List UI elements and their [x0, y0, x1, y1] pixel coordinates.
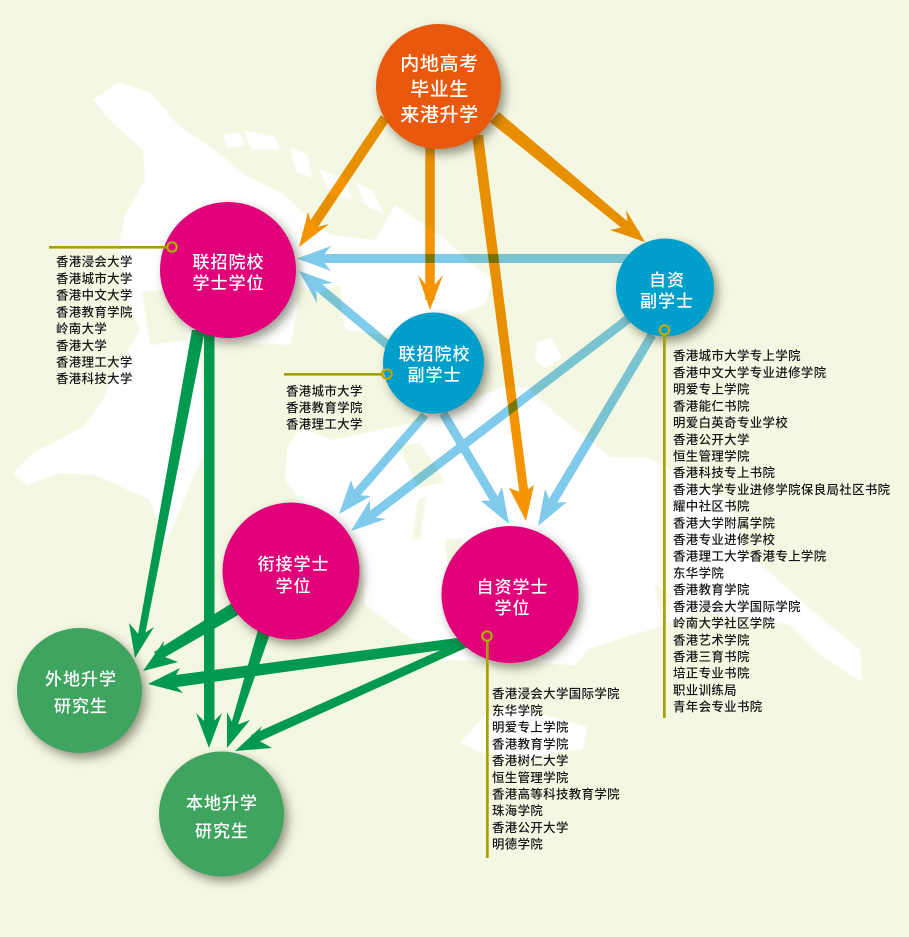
node: 联招院校学士学位: 学士学位 [192, 273, 264, 293]
institution list: 自资副学士: 香港中文大学专业进修学院 [673, 365, 827, 380]
institution list: 自资学士: 东华学院 [492, 703, 543, 718]
institution list: 联招副学士: 香港理工大学 [286, 416, 363, 432]
node: 自资副学士: 副学士 [640, 291, 694, 311]
arrow: 联招副学士 to 自资学士 [443, 413, 509, 524]
institution list: 联招学士: 岭南大学 [56, 321, 107, 336]
institution list: 自资学士: 明爱专上学院 [492, 720, 569, 735]
institution list: 自资学士: 香港树仁大学 [492, 753, 569, 768]
node: 内地高考毕业生来港升学 [376, 24, 501, 149]
institution list: 自资副学士: 香港大学专业进修学院保良局社区书院 [673, 482, 891, 497]
arrow: 内地 to 联招学士 [299, 118, 385, 247]
institution list: 自资副学士: 香港理工大学香港专上学院 [673, 549, 827, 564]
node: 衔接学士学位: 衔接学士 [258, 554, 330, 574]
arrow: 联招副学士 to 衔接学士 [339, 415, 425, 514]
callout line: 自资学士 [482, 631, 492, 858]
institution list: 联招副学士: 香港城市大学 [286, 384, 363, 398]
node: 内地高考毕业生来港升学: 内地高考 [400, 53, 479, 75]
institution list: 自资学士: 香港教育学院 [492, 736, 569, 751]
arrow: 联招学士 to 外地升学 [129, 330, 205, 658]
institution list: 自资副学士: 香港科技专上书院 [673, 465, 776, 480]
arrow: 自资副学士 to 自资学士 [538, 335, 652, 526]
institution list: 自资学士: 珠海学院 [492, 803, 543, 818]
institution list: 联招副学士: 香港教育学院 [286, 400, 363, 415]
node: 联招院校副学士: 联招院校 [398, 345, 470, 364]
institution list: 自资副学士: 培正专业书院 [673, 666, 750, 681]
node: 本地升学研究生 [159, 752, 284, 876]
institution list: 自资学士: 香港公开大学 [492, 820, 569, 835]
callout line: 联招副学士 [284, 369, 392, 379]
institution list: 自资副学士: 香港城市大学专上学院 [673, 348, 801, 363]
institution list: 联招学士: 香港科技大学 [56, 371, 133, 386]
arrow: 内地 to 自资学士 [472, 135, 534, 521]
arrows: light blue transfer routes [297, 246, 652, 531]
institution list: 自资副学士: 香港三育书院 [673, 649, 750, 664]
node: 内地高考毕业生来港升学: 毕业生 [410, 78, 469, 100]
institution list: 自资副学士: 香港艺术学院 [673, 632, 750, 647]
institution list: 自资学士: 香港浸会大学国际学院 [492, 686, 620, 701]
institution list: 自资副学士: 青年会专业书院 [673, 699, 763, 714]
institution list: 自资副学士: 香港浸会大学国际学院 [673, 599, 801, 614]
institution list: 自资副学士: 岭南大学社区学院 [673, 616, 776, 631]
institution list: 自资学士: 香港高等科技教育学院 [492, 786, 620, 801]
node: 联招院校副学士 [383, 312, 484, 414]
institution list: 联招学士: 香港教育学院 [56, 304, 133, 319]
institution list: 自资学士: 明德学院 [492, 837, 543, 852]
institution list: 自资副学士: 香港公开大学 [673, 432, 750, 447]
node: 本地升学研究生: 本地升学 [186, 793, 258, 813]
node: 自资学士学位: 学位 [494, 598, 530, 618]
node: 联招院校学士学位: 联招院校 [192, 253, 264, 272]
institution list: 自资副学士: 香港大学附属学院 [673, 515, 776, 530]
arrow: 联招学士 to 本地升学 [196, 330, 222, 748]
node: 本地升学研究生: 研究生 [195, 821, 249, 841]
arrow: 自资副学士 to 衔接学士 [351, 316, 632, 531]
institution list: 自资副学士: 香港能仁书院 [673, 398, 750, 413]
arrow: 自资副学士 to 联招学士 [297, 246, 640, 271]
institution list: 联招学士: 香港理工大学 [56, 354, 133, 369]
arrow: 内地 to 自资副学士 [490, 112, 645, 242]
arrow: 自资学士 to 外地升学 [148, 638, 470, 693]
institution list: 联招学士: 香港浸会大学 [56, 254, 133, 269]
node: 自资学士学位: 自资学士 [476, 577, 548, 597]
institution list: 自资副学士: 恒生管理学院 [673, 448, 750, 463]
node: 自资副学士: 自资 [649, 271, 685, 290]
institution list: 联招学士: 香港中文大学 [56, 288, 133, 303]
arrows: green routes to postgraduate study [129, 330, 470, 751]
institution list: 联招学士: 香港城市大学 [56, 271, 133, 286]
callout line: 自资副学士 [660, 325, 669, 718]
institution list: 自资副学士: 香港专业进修学校 [673, 532, 776, 547]
institution list: 自资副学士: 明爱白英奇专业学校 [673, 415, 788, 430]
arrow: 衔接学士 to 本地升学 [227, 630, 270, 748]
node: 外地升学研究生: 外地升学 [45, 669, 117, 689]
institution list: 自资副学士: 香港教育学院 [673, 582, 750, 597]
node: 自资学士学位 [442, 526, 578, 663]
node: 衔接学士学位: 学位 [276, 576, 312, 596]
arrow: 衔接学士 to 外地升学 [143, 603, 240, 671]
institution list: 自资副学士: 东华学院 [673, 565, 724, 580]
node: 联招院校学士学位 [160, 202, 296, 338]
node: 联招院校副学士: 副学士 [408, 365, 462, 385]
node: 外地升学研究生: 研究生 [54, 696, 108, 716]
arrow: 自资学士 to 本地升学 [235, 646, 470, 751]
institution list: 自资副学士: 职业训练局 [673, 682, 737, 697]
arrow: 内地 to 联招副学士 [418, 145, 443, 310]
node: 衔接学士学位 [222, 502, 360, 640]
callout line: 联招学士 [49, 242, 177, 252]
node: 内地高考毕业生来港升学: 来港升学 [400, 104, 479, 126]
institution list: 自资学士: 恒生管理学院 [492, 770, 569, 785]
node: 外地升学研究生 [17, 628, 142, 753]
institution list: 自资副学士: 耀中社区书院 [673, 499, 750, 514]
node: 自资副学士 [616, 238, 714, 336]
arrow: 联招副学士 to 联招学士 [299, 271, 390, 347]
institution list: 联招学士: 香港大学 [56, 338, 107, 353]
arrows: orange routes from mainland students [299, 112, 645, 521]
institution list: 自资副学士: 明爱专上学院 [673, 382, 750, 397]
